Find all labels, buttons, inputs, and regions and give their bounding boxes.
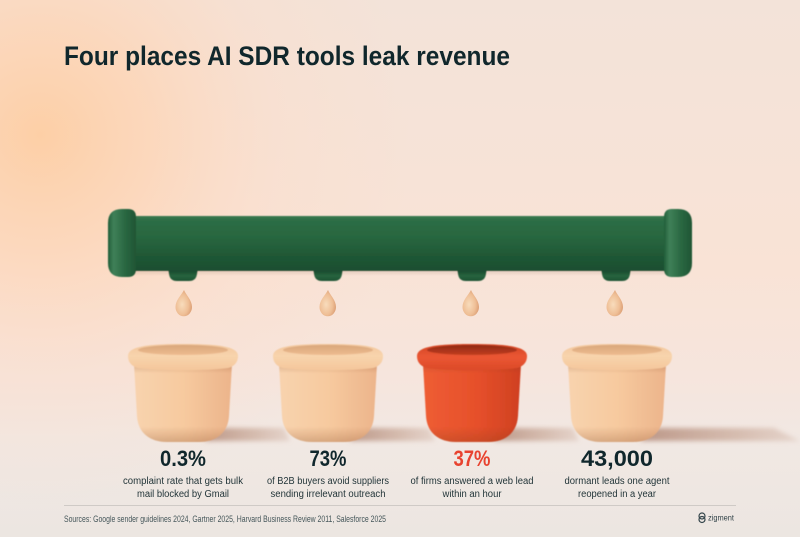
sources: Sources: Google sender guidelines 2024, Gartner 2025, Harvard Business Review 2011, Salesforce 2025 [64,514,386,524]
pipe shadow [130,269,670,273]
pot 3 [417,344,527,442]
pot 1 [128,344,238,442]
stat 2: of B2B buyers avoid suppliers [267,476,389,487]
logo: zigment: zigment [708,514,735,522]
logo: zigment [699,513,735,522]
nozzles [168,268,631,281]
right cap [664,209,692,277]
stat 2: 73% [310,446,346,471]
stat 4 [564,446,670,500]
stat 3: of firms answered a web lead [410,476,534,487]
stat 2 [267,446,389,500]
pipe [108,209,692,281]
stat 1 [123,446,244,500]
floor shadows [204,428,800,441]
stat 1: mail blocked by Gmail [137,489,229,500]
title: Four places AI SDR tools leak revenue [64,41,510,71]
stat 1: 0.3% [160,446,206,471]
stat 3: 37% [454,446,490,471]
stat 3: within an hour [442,489,502,500]
pipe body [130,216,670,271]
stat 4: reopened in a year [578,489,657,500]
pot 2 [273,344,383,442]
stat 4: dormant leads one agent [564,476,670,487]
icon: logo mark [699,513,705,522]
stat 1: complaint rate that gets bulk [123,476,244,487]
left cap [108,209,136,277]
drops [176,290,623,316]
stat 2: sending irrelevant outreach [270,489,386,500]
stat 4: 43,000 [581,446,653,471]
pot 4 [562,344,672,442]
stat 3 [410,446,534,500]
